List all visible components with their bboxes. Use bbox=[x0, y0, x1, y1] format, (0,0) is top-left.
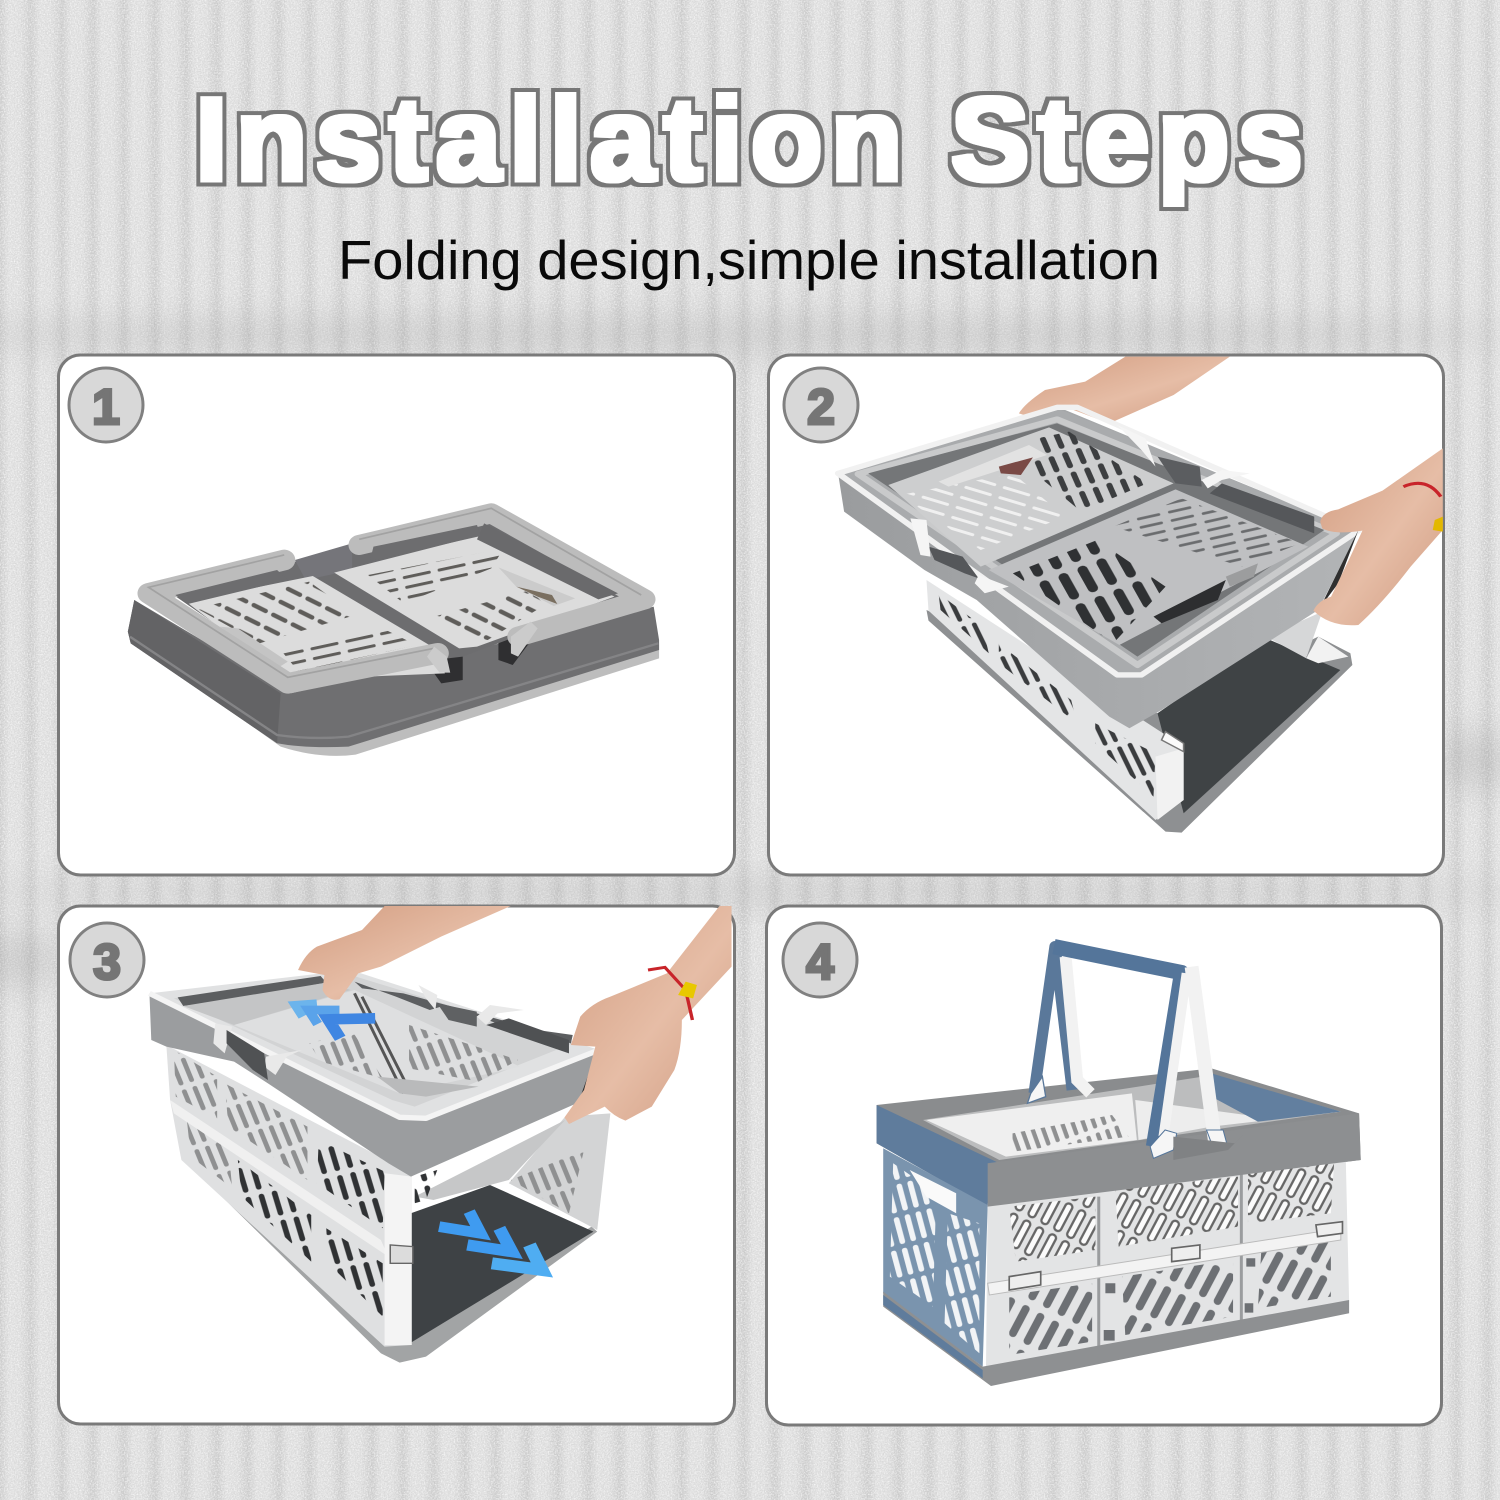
panel: step 1 bbox=[58, 355, 734, 875]
basket being lifted with hands bbox=[838, 357, 1443, 833]
step 4 badge: 4 bbox=[806, 934, 834, 990]
panel: step 2 bbox=[768, 355, 1444, 875]
blue arrows: bottom bbox=[439, 1212, 542, 1270]
step 3 badge: 3 bbox=[93, 934, 121, 990]
hand: back bbox=[1019, 357, 1230, 423]
step 3 badge bbox=[70, 923, 144, 997]
step 4 badge bbox=[783, 923, 857, 997]
step 1 badge bbox=[69, 368, 143, 442]
subtitle: Folding design,simple installation bbox=[338, 229, 1160, 291]
hand: left bbox=[298, 906, 511, 1000]
panel: step 4 bbox=[766, 906, 1442, 1425]
hand: right bbox=[564, 906, 732, 1124]
hand: right bbox=[1313, 448, 1443, 625]
step 1 badge: 1 bbox=[92, 379, 120, 435]
title: Installation Steps bbox=[195, 74, 1311, 206]
panel: step 3 bbox=[58, 906, 734, 1424]
basket half open with hands bbox=[149, 906, 732, 1363]
blue arrows: top bbox=[295, 1003, 375, 1038]
assembled basket with blue handles bbox=[877, 947, 1361, 1386]
step 2 badge bbox=[784, 368, 858, 442]
folded basket bbox=[128, 508, 659, 756]
handle: back bbox=[1034, 947, 1072, 1093]
handle: front bbox=[1054, 947, 1182, 1147]
step 2 badge: 2 bbox=[807, 379, 835, 435]
